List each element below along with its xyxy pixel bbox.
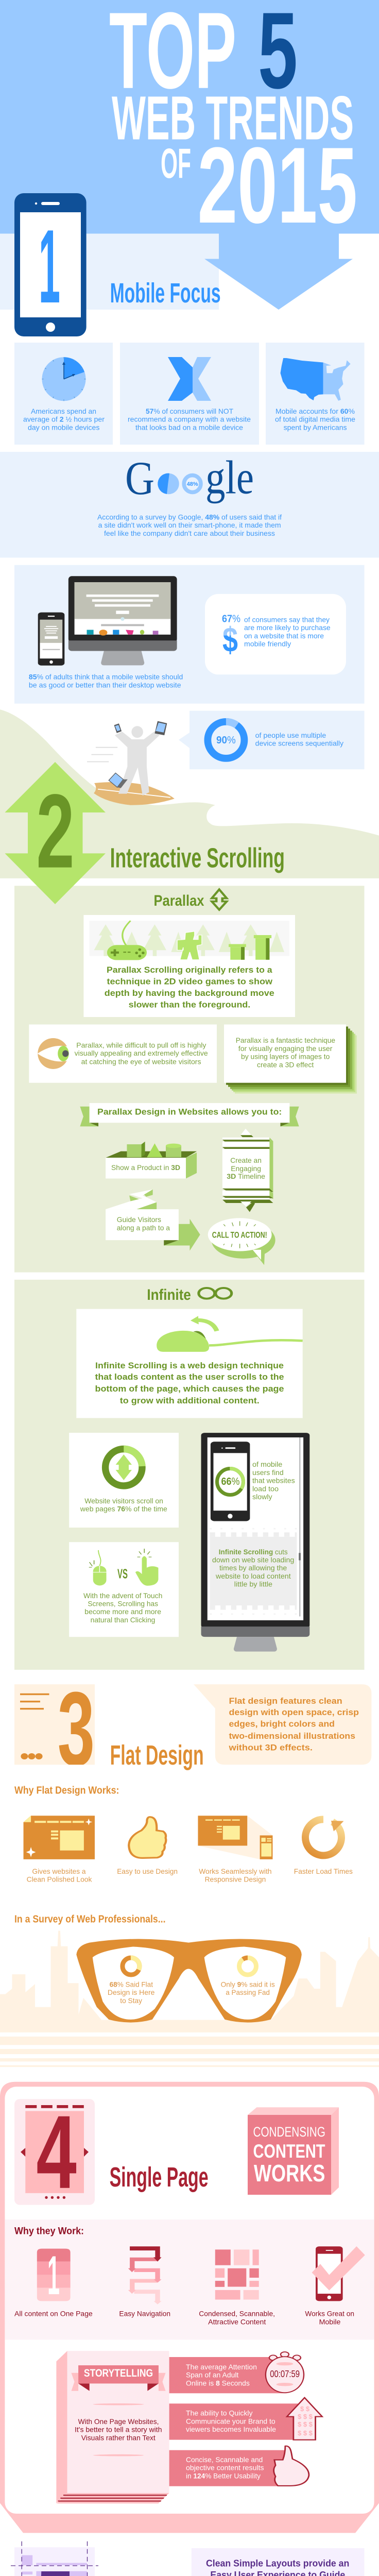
benefit: clean look: Clean Polished Look (27, 1875, 92, 1884)
card: layered 3D effect: by using layers of images to (241, 1053, 330, 1061)
card: layered 3D effect: create a 3D effect (257, 1060, 314, 1069)
chart: 66 percent donut (217, 1468, 243, 1495)
block: show a product in 3D: Show a Product in 3D (111, 1163, 180, 1172)
benefit: all content on one page: All content on One Page (14, 2310, 93, 2318)
chart: 66 percent donut: 66% (221, 1476, 240, 1487)
benefit: responsive (198, 1816, 272, 1884)
benefit: clean look: Gives websites a (32, 1867, 86, 1875)
heading: survey: In a Survey of Web Professionals... (14, 1913, 166, 1925)
icon: dollar arrow: $ $ $ (298, 2413, 313, 2420)
card: infinite definition (76, 1309, 303, 1418)
benefit: easy navigation (119, 2246, 170, 2318)
text: 68 percent (108, 1980, 155, 2005)
skyline background (0, 1930, 379, 2032)
text: 68 percent: 68% Said Flat (110, 1980, 153, 1988)
text: touch screens: natural than Clicking (91, 1616, 155, 1624)
text: visually appealing: visually appealing and extremely effective (75, 1049, 208, 1057)
block: guide visitors: Guide Visitors (117, 1215, 161, 1224)
text: 68 percent: to Stay (120, 1996, 142, 2005)
icon: stopwatch (266, 2352, 304, 2393)
block: engaging 3D timeline (222, 1129, 273, 1212)
icon: phone with number 1: 1 (39, 208, 60, 325)
illustration: glasses with survey charts (76, 1939, 302, 2023)
icon: infinity (199, 1288, 232, 1299)
text: parallax definition: slower than the foreground. (129, 999, 250, 1009)
text: infinite scrolling loading times: little by little (234, 1580, 272, 1588)
panel: infinite (14, 1280, 365, 1670)
text: Google survey: feel like the company didn't care about their business (104, 529, 275, 537)
card: layered 3D effect (224, 1024, 357, 1094)
card: layered 3D effect: Parallax is a fantastic technique (236, 1036, 335, 1044)
icon: dollar arrow: $ $ (300, 2405, 310, 2413)
box: condensing content works: CONTENT (253, 2141, 325, 2162)
text: visually appealing: at catching the eye of website visitors (81, 1057, 201, 1065)
text: touch screens (83, 1591, 162, 1624)
icon: dollar arrow (287, 2398, 322, 2440)
benefit: faster load: Faster Load Times (294, 1867, 353, 1875)
callout: 67 percent: are more likely to purchase (244, 623, 331, 632)
block: engaging 3D timeline: Create an (230, 1156, 262, 1164)
benefit: works on mobile: Works Great on (305, 2310, 354, 2318)
bar: attention span: Span of an Adult (186, 2371, 238, 2379)
panel: single page frame (0, 2082, 379, 2533)
text: slow load: users find (252, 1468, 284, 1477)
text: 76 percent (80, 1497, 167, 1513)
benefit: responsive: Responsive Design (205, 1875, 266, 1884)
chart: 90 percent donut (208, 722, 244, 758)
text: 68 percent: Design is Here (108, 1988, 155, 1996)
text: visually appealing: Parallax, while difficult to pull off is highly (76, 1041, 206, 1049)
text: 76 percent: web pages 76% of the time (80, 1505, 167, 1513)
callout: flat design definition: design with open space, crisp (229, 1707, 359, 1717)
icon: number 4 page: 4 (36, 2094, 77, 2210)
speech bubble: call to action: CALL TO ACTION! (212, 1230, 267, 1240)
bar: brand communication (169, 2398, 322, 2440)
icon: clock (42, 357, 85, 401)
block: show a product in 3D (106, 1142, 197, 1178)
illustration: storytelling book: Visuals rather than Text (81, 2433, 156, 2442)
panel: why they work (5, 2219, 374, 2340)
panel: won't recommend (120, 343, 259, 445)
benefit: condensed content: Condensed, Scannable, (199, 2310, 275, 2318)
heading: Interactive Scrolling: Interactive Scrolling (110, 843, 285, 874)
card: parallax definition (83, 915, 295, 1017)
text: infinite definition: Infinite Scrolling is a web design technique (95, 1361, 284, 1370)
text: 60 percent: Mobile accounts for 60% (275, 407, 355, 415)
benefit: easy navigation: Easy Navigation (119, 2310, 170, 2318)
illustration: storytelling book: With One Page Websites, (78, 2417, 159, 2426)
icon: dollar arrow: $ $ $ (298, 2420, 313, 2428)
chart: 90 percent donut: 90% (216, 735, 236, 746)
illustration: storytelling book: STORYTELLING (84, 2367, 153, 2379)
text: 9 percent: Only 9% said it is (221, 1980, 275, 1988)
text: slow load: slowly (252, 1493, 272, 1501)
callout: flat design definition: two-dimensional illustrations (229, 1731, 355, 1741)
benefit: clean look (24, 1816, 95, 1884)
bar: concise content: objective content results (186, 2464, 264, 2472)
card: touch vs click: VS (117, 1566, 128, 1582)
callout: clean simple layouts (192, 2548, 365, 2576)
header background (0, 0, 379, 234)
text: infinite definition: that loads content as the user scrolls to the (95, 1372, 284, 1382)
icon: phone with number 1 (14, 193, 87, 336)
text: slow load: load too (252, 1484, 279, 1493)
text: 85 percent (29, 673, 183, 689)
text: slow load: that websites (252, 1477, 295, 1485)
logo: Google with charts: G (125, 452, 154, 504)
callout: 67 percent: $ (222, 620, 238, 659)
section 1 band (0, 234, 219, 310)
bar: attention span: Online is 8 Seconds (186, 2379, 250, 2387)
block: guide visitors (106, 1190, 200, 1250)
text: 85 percent: 85% of adults think that a mobile website should (29, 673, 183, 681)
text: parallax definition: depth by having the background move (105, 988, 274, 998)
card: 76 percent scroll (69, 1433, 179, 1528)
ribbon heading (80, 1103, 299, 1126)
icon: X mark (168, 357, 211, 401)
panel: devices (14, 565, 365, 704)
illustration: game scene (90, 921, 289, 960)
hill background: interactive scrolling (0, 709, 379, 878)
icon: stopwatch: 00:07:59 (270, 2369, 300, 2379)
callout: 67 percent: of consumers say that they (244, 615, 330, 623)
text: infinite scrolling loading times: website to load content (215, 1572, 291, 1580)
text: hours per day: average of 2 ½ hours per (23, 415, 105, 423)
panel: media time (266, 343, 365, 445)
heading: Why Flat Design Works: Why Flat Design Works: (14, 1785, 119, 1796)
illustration: storytelling book (56, 2351, 169, 2503)
illustration: storytelling book: It's better to tell a story with (75, 2426, 162, 2434)
callout: 67 percent: on a website that is more (244, 632, 324, 640)
text: multiple devices: of people use multiple (255, 731, 326, 739)
text: 9 percent: a Passing Fad (226, 1988, 270, 1996)
text: touch screens: With the advent of Touch (83, 1591, 162, 1600)
text: Google survey (97, 513, 282, 537)
card: layered 3D effect: for visually engaging the user (238, 1044, 333, 1053)
bar: concise content: in 124% Better Usability (186, 2471, 261, 2480)
text: 57 percent: 57% of consumers will NOT (146, 407, 233, 415)
card: touch vs click (69, 1542, 179, 1637)
icon: eye (38, 1038, 69, 1069)
arrow: double headed with number 2 (5, 762, 106, 904)
illustration: person juggling devices (87, 721, 175, 805)
text: 85 percent: be as good or better than their desktop website (29, 681, 181, 689)
icon: smartphone (38, 613, 64, 666)
text: parallax definition: technique in 2D video games to show (107, 977, 273, 987)
chart: 76 percent donut (106, 1449, 142, 1486)
icon: mouse (157, 1316, 303, 1352)
panel: mobile time (14, 343, 113, 445)
text: Google survey: a site didn't work well on their smart-phone, it made them (98, 521, 281, 529)
text: infinite definition (95, 1361, 284, 1405)
text: multiple devices (255, 731, 343, 747)
icon: USA map (281, 358, 351, 401)
logo: Google with charts: gle (205, 451, 254, 504)
text: 57 percent (128, 407, 251, 431)
heading: Parallax: Parallax (153, 892, 204, 909)
text: slow load (252, 1460, 295, 1501)
text: 60 percent (275, 407, 355, 431)
benefit: faster load (294, 1813, 353, 1875)
callout: 67 percent (205, 594, 346, 674)
callout: flat design definition: Flat design features clean (229, 1696, 342, 1706)
icon: desktop monitor (68, 576, 177, 665)
text: visually appealing (75, 1041, 208, 1065)
callout: clean simple layouts: Clean Simple Layouts provide an (206, 2558, 349, 2569)
arrow: down from header (204, 233, 353, 310)
benefit: responsive: Works Seamlessly with (199, 1867, 272, 1875)
benefit: easy to use: Easy to use Design (117, 1867, 178, 1875)
text: infinite scrolling loading times: Infinite Scrolling cuts (219, 1548, 288, 1556)
icon: number 3 flat page: 3 (58, 1670, 95, 1788)
heading: why they work: Why they Work: (14, 2226, 84, 2237)
icon: dollar arrow: $ $ $ (298, 2429, 313, 2437)
text: 9 percent (221, 1980, 275, 1996)
text: infinite scrolling loading times: times by allowing the (219, 1564, 287, 1572)
bar: attention span: The average Attention (186, 2363, 257, 2371)
heading: Mobile Focus: Mobile Focus (110, 278, 221, 309)
text: 60 percent: spent by Americans (284, 423, 347, 431)
text: infinite definition: bottom of the page, which causes the page (95, 1384, 284, 1394)
benefit: condensed content (199, 2249, 275, 2326)
title: OF (161, 140, 191, 187)
heading: Flat Design: Flat Design (110, 1740, 204, 1771)
icon: thumbs up (274, 2446, 309, 2486)
bar: attention span (169, 2352, 304, 2393)
block: engaging 3D timeline: 3D Timeline (227, 1172, 265, 1180)
illustration: monitor with infinite scroll (201, 1433, 309, 1652)
panel: 90 percent multi-device (179, 711, 365, 769)
text: 57 percent: that looks bad on a mobile device (135, 423, 243, 431)
text: parallax definition: Parallax Scrolling originally refers to a (107, 965, 272, 975)
panel: Google survey (0, 451, 379, 557)
logo: Google with charts (125, 451, 254, 504)
benefit: all content on one page (14, 2244, 93, 2318)
text: hours per day: day on mobile devices (28, 423, 99, 431)
benefit: works on mobile: Mobile (319, 2317, 341, 2326)
text: slow load: of mobile (252, 1460, 283, 1468)
card: eye appeal (29, 1024, 217, 1083)
bar: brand communication: Communicate your Brand to (186, 2417, 275, 2425)
arrow: double headed with number 2: 2 (36, 773, 75, 890)
text: touch screens: become more and more (84, 1607, 161, 1616)
callout: flat design definition: without 3D effects. (228, 1742, 313, 1753)
text: infinite definition: to grow with additional content. (120, 1396, 260, 1405)
text: Google survey: According to a survey by Google, 48% of users said that if (97, 513, 282, 521)
panel: number 5 layout icon (11, 2541, 98, 2576)
heading: Single Page: Single Page (110, 2162, 209, 2193)
text: hours per day: Americans spend an (31, 407, 96, 415)
benefit: condensed content: Attractive Content (208, 2317, 266, 2326)
panel: parallax (14, 886, 365, 1273)
box: condensing content works: CONDENSING (253, 2124, 325, 2140)
text: 76 percent: Website visitors scroll on (84, 1497, 163, 1505)
bar: concise content: Concise, Scannable and (186, 2455, 263, 2464)
bar: concise content (169, 2446, 309, 2486)
title (109, 0, 357, 246)
text: touch screens: Screens, Scrolling has (88, 1599, 158, 1607)
benefit: easy to use (117, 1817, 178, 1875)
benefit: works on mobile (305, 2246, 365, 2326)
decorative bottom bands (0, 2037, 379, 2067)
box: condensing content works: WORKS (254, 2160, 325, 2187)
text: parallax definition (105, 965, 274, 1009)
benefit: all content on one page: 1 (47, 2244, 60, 2306)
text: hours per day (23, 407, 105, 431)
callout: flat design definition (194, 1684, 371, 1765)
text: multiple devices: device screens sequentially (255, 739, 343, 747)
logo: Google with charts: 48% (187, 481, 198, 487)
bar: brand communication: The ability to Quickly (186, 2409, 252, 2417)
box: condensing content works (248, 2107, 339, 2195)
icon: mouse versus touch (89, 1549, 158, 1586)
callout: flat design definition: edges, bright colors and (229, 1719, 335, 1729)
text: 60 percent: of total digital media time (275, 415, 355, 423)
icon: up-down arrows (212, 889, 227, 910)
callout: 67 percent: mobile friendly (244, 640, 291, 648)
heading: Infinite: Infinite (147, 1286, 191, 1303)
speech bubble: call to action (208, 1218, 275, 1265)
block: guide visitors: along a path to a (117, 1224, 170, 1232)
callout: 67 percent: 67% (222, 613, 240, 624)
ribbon heading: Parallax Design in Websites allows you to: (97, 1107, 282, 1117)
text: infinite scrolling loading times (212, 1548, 294, 1588)
text: 57 percent: recommend a company with a website (128, 415, 251, 423)
bar: brand communication: viewers becomes Invaluable (186, 2425, 276, 2433)
text: infinite scrolling loading times: down on web site loading (212, 1556, 294, 1564)
chart: 68 percent (123, 1958, 140, 1975)
icon: number 3 flat page (14, 1684, 95, 1765)
chart: 9 percent (236, 1955, 260, 1978)
block: engaging 3D timeline: Engaging (231, 1164, 261, 1173)
